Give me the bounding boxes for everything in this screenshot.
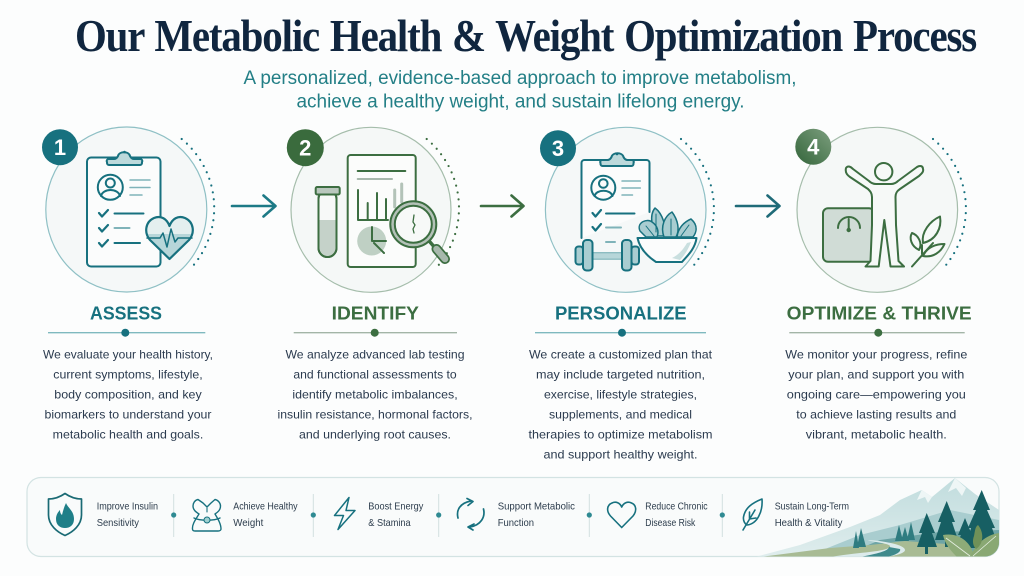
divider 1: [48, 329, 205, 337]
dotted arc 3: [681, 139, 714, 268]
icon: scale, figure and plant: [823, 163, 944, 266]
badge 3: [540, 130, 576, 166]
foreground leaves: [943, 534, 974, 557]
subtitle: A personalized, evidence-based approach to improve metabolism,: [244, 68, 796, 89]
text: boost energy and stamina: & Stamina: [368, 517, 411, 529]
text: personalize body: and support healthy weight.: [544, 448, 698, 462]
heading: assess: ASSESS: [90, 302, 162, 323]
pine trees: [917, 490, 998, 554]
icon: torso: [192, 500, 221, 531]
heading: personalize: PERSONALIZE: [555, 302, 687, 323]
separator dots: [171, 512, 725, 518]
text: assess body: biomarkers to understand your: [44, 408, 212, 422]
subtitle: achieve a healthy weight, and sustain lifelong energy.: [296, 92, 744, 112]
badge 3: 3: [552, 136, 564, 161]
text: improve insulin sensitivity: Improve Insulin: [97, 500, 158, 512]
text: assess body: We evaluate your health history,: [43, 348, 213, 362]
text: personalize body: supplements, and medical: [549, 408, 692, 422]
magnifier handle: [430, 242, 445, 259]
text: identify body: We analyze advanced lab testing: [286, 348, 464, 362]
landscape illustration: [755, 478, 999, 557]
heading: identify: IDENTIFY: [332, 302, 420, 323]
panel: benefits strip: [27, 478, 999, 557]
text: achieve healthy weight: Achieve Healthy: [233, 500, 298, 512]
text: personalize body: [528, 348, 713, 462]
panel: step 3 personalize: [528, 127, 714, 462]
text: improve insulin sensitivity: [97, 500, 158, 529]
dotted arc 1: [182, 139, 214, 267]
text: identify body: insulin resistance, hormonal factors,: [278, 408, 472, 422]
separators: [174, 494, 722, 537]
text: identify body: [278, 348, 472, 442]
text: personalize body: exercise, lifestyle strategies,: [544, 388, 697, 402]
text: optimize body: vibrant, metabolic health.: [806, 428, 947, 442]
panel: step 4 optimize and thrive: [785, 127, 972, 442]
badge 1: 1: [54, 135, 66, 160]
panel: step 1 assess: [42, 127, 214, 442]
text: achieve healthy weight: Weight: [233, 517, 263, 529]
icon: cycle arrows: [458, 498, 484, 530]
badge 4: [795, 129, 831, 165]
text: identify body: identify metabolic imbalances,: [292, 388, 458, 402]
icon circle 3: [545, 127, 706, 292]
text: support metabolic function: Support Metabolic: [498, 500, 575, 512]
panel: step 2 identify: [278, 127, 472, 442]
badge 2: [287, 129, 324, 166]
icon: clipboard with heart: [87, 151, 193, 266]
icon: heart: [608, 502, 636, 528]
text: reduce chronic disease risk: [645, 500, 708, 529]
divider 2: [294, 329, 457, 337]
icon: clipboard, dumbbell and salad bowl: [576, 153, 696, 270]
text: reduce chronic disease risk: Disease Risk: [645, 517, 696, 529]
text: optimize body: your plan, and support you with: [788, 368, 964, 382]
text: optimize body: We monitor your progress, refine: [785, 348, 968, 362]
badge 1: [42, 129, 78, 165]
text: personalize body: We create a customized plan that: [529, 348, 713, 362]
arrow 1: [232, 196, 276, 216]
text: sustain long-term health and vitality: [775, 500, 849, 529]
text: personalize body: may include targeted nutrition,: [536, 368, 705, 382]
icon: lab report and magnifier: [316, 155, 445, 267]
divider 4: [789, 329, 965, 337]
icon circle 4: [797, 127, 958, 292]
arrow 3: [736, 196, 780, 216]
icon circle 2: [291, 127, 451, 292]
text: optimize body: [785, 348, 968, 442]
text: support metabolic function: [498, 500, 575, 529]
divider 3: [535, 329, 706, 337]
text: improve insulin sensitivity: Sensitivity: [97, 517, 140, 529]
text: boost energy and stamina: [368, 500, 424, 529]
heading: optimize and thrive: OPTIMIZE & THRIVE: [787, 302, 972, 323]
text: optimize body: to achieve lasting results and: [796, 408, 956, 422]
text: sustain long-term health and vitality: Sustain Long-Term: [775, 500, 849, 512]
text: assess body: [43, 348, 213, 442]
text: achieve healthy weight: [233, 500, 298, 529]
text: reduce chronic disease risk: Reduce Chronic: [645, 500, 708, 512]
subtitle: [244, 68, 796, 112]
text: assess body: metabolic health and goals.: [53, 428, 203, 442]
badge 4: 4: [807, 134, 820, 160]
badge 2: 2: [299, 136, 311, 160]
text: assess body: current symptoms, lifestyle,: [53, 368, 203, 382]
text: identify body: and underlying root causes.: [299, 428, 451, 442]
text: optimize body: ongoing care—empowering you: [787, 388, 966, 402]
text: identify body: and functional assessments to: [293, 368, 457, 382]
icon: leaf: [743, 499, 762, 530]
text: sustain long-term health and vitality: Health & Vitality: [775, 517, 843, 529]
arrow 2: [481, 196, 524, 216]
dotted arc 2: [427, 139, 459, 267]
text: assess body: body composition, and key: [54, 388, 202, 402]
text: boost energy and stamina: Boost Energy: [368, 500, 424, 512]
icon: lightning bolt: [334, 498, 355, 530]
text: support metabolic function: Function: [498, 517, 534, 529]
text: personalize body: therapies to optimize metabolism: [528, 428, 712, 442]
dotted arc 4: [933, 139, 966, 268]
icon: shield flame: [48, 494, 82, 536]
icon circle 1: [46, 127, 207, 292]
